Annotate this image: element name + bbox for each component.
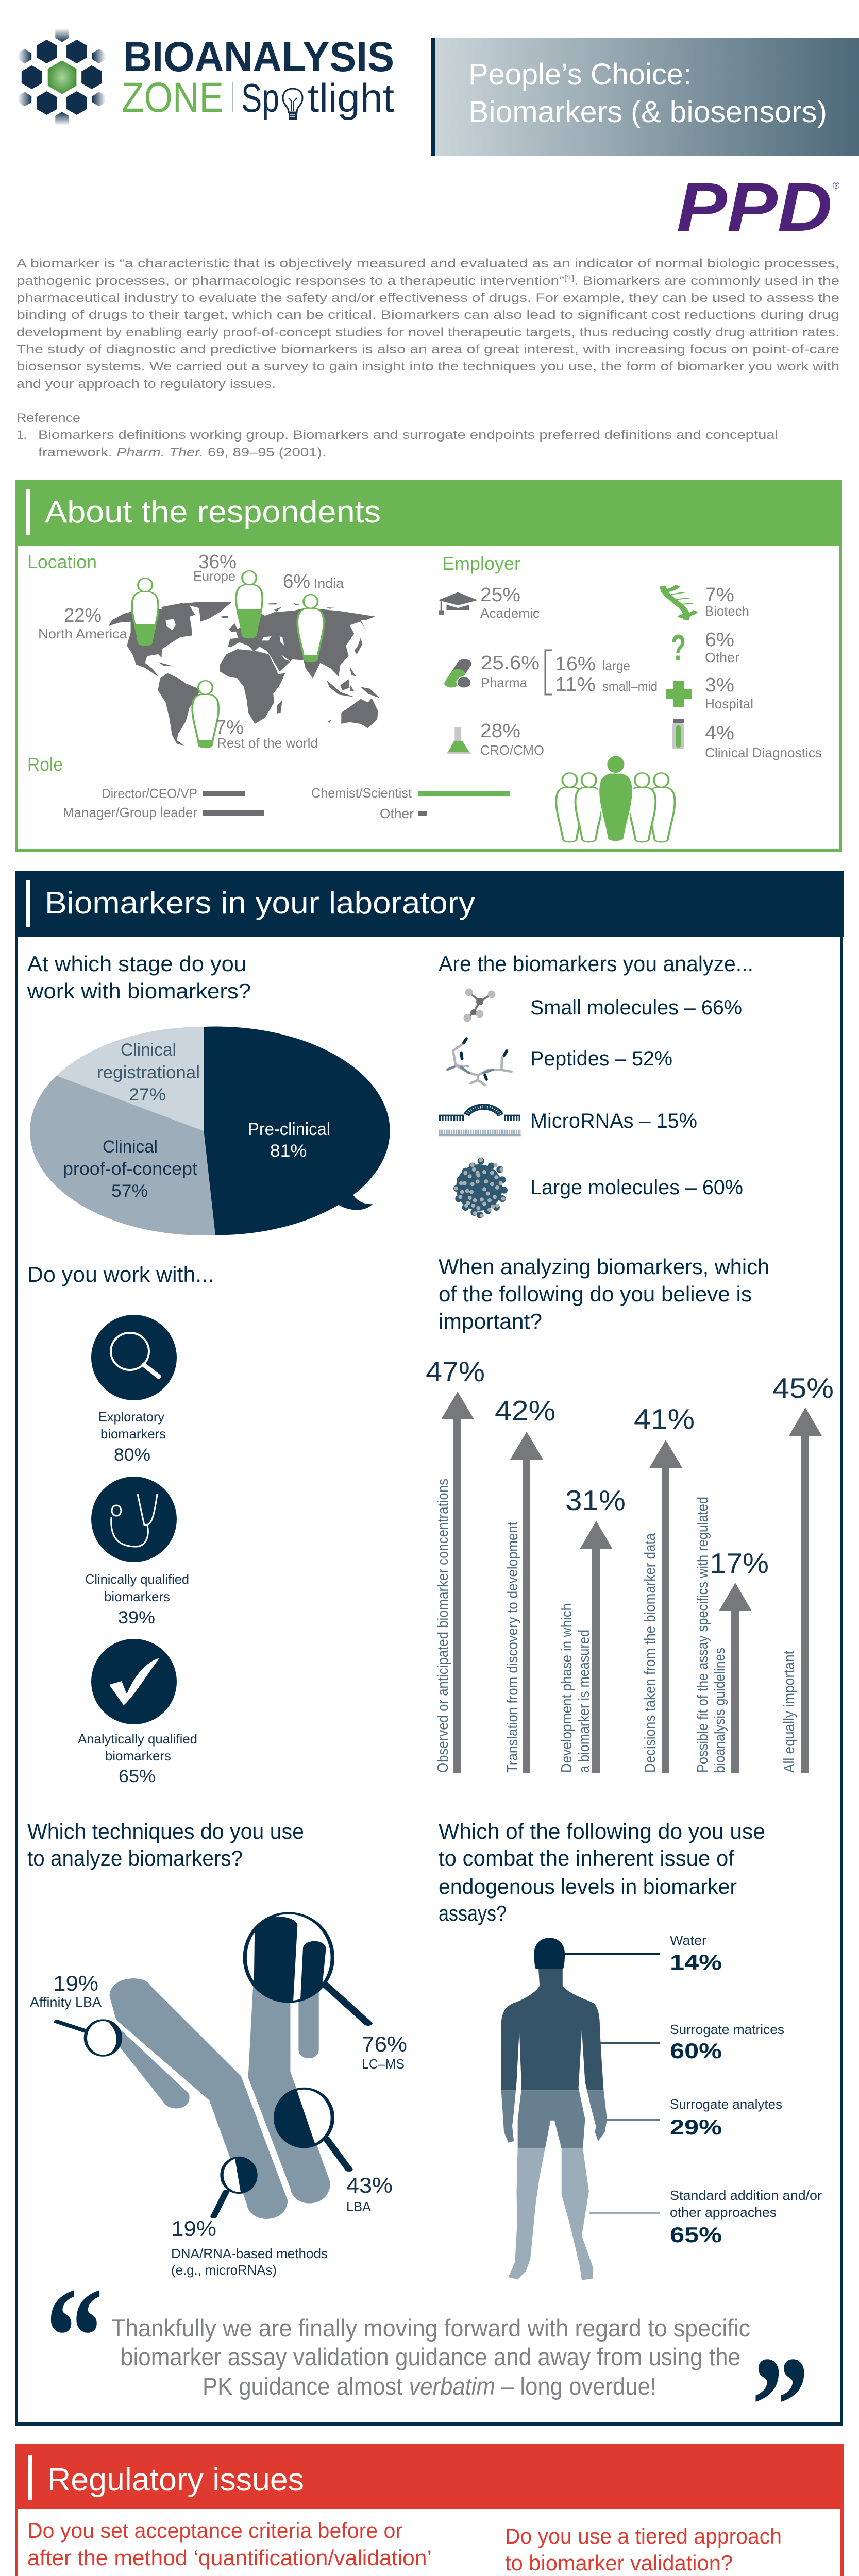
question: tiered approach: to biomarker validation? <box>505 2551 733 2575</box>
question: which techniques: Which techniques do you use <box>27 1819 304 1843</box>
magnifier: affinity LBA <box>57 2019 123 2058</box>
employer: CRO/CMO: 28% <box>480 720 520 742</box>
employer: clinical diagnostics: 4% <box>705 722 734 744</box>
icon: hospital cross <box>666 681 692 707</box>
stat: exploratory biomarkers: biomarkers <box>100 1426 166 1442</box>
location labels: Europe <box>193 568 235 584</box>
icon: peptide <box>447 1039 512 1085</box>
icon: test tube <box>672 719 684 749</box>
stat: analytically qualified biomarkers: Analytically qualified <box>78 1731 197 1747</box>
employer: other: 6% <box>705 629 734 651</box>
heading: about the respondents <box>26 489 381 535</box>
figure: India <box>296 595 325 664</box>
stat: analytically qualified biomarkers <box>78 1731 197 1786</box>
intro paragraph <box>16 257 839 391</box>
location labels: 6% <box>283 571 310 592</box>
figure: North America <box>131 578 159 647</box>
question: when analyzing biomarkers: important? <box>439 1309 542 1333</box>
location labels: 22% <box>64 605 102 626</box>
callout: surrogate analytes: Surrogate analytes <box>670 2096 782 2112</box>
question: when analyzing biomarkers: When analyzing biomarkers, which <box>439 1255 769 1279</box>
technique labels: LC–MS <box>362 2056 405 2072</box>
icon: large molecule <box>456 1160 504 1216</box>
question: which techniques: to analyze biomarkers? <box>27 1846 243 1870</box>
question: at which stage: work with biomarkers? <box>27 979 251 1003</box>
role bars: Other <box>380 806 414 821</box>
label: microRNAs: MicroRNAs – 15% <box>530 1110 697 1132</box>
employer: clinical diagnostics <box>705 722 822 760</box>
panel: about the respondents <box>15 480 842 850</box>
icon: microRNA hairpin <box>439 1107 521 1135</box>
quote: PK guidance almost verbatim – long overdue! <box>203 2372 656 2400</box>
location labels <box>38 551 344 751</box>
diagram: human body <box>501 1938 607 2280</box>
subheading: role: Role <box>27 754 63 775</box>
logo: wordmark ZONE Spotlight: Sp <box>241 75 279 121</box>
label: peptides: Peptides – 52% <box>530 1047 672 1070</box>
technique labels: (e.g., microRNAs) <box>171 2262 277 2278</box>
stat: exploratory biomarkers: 80% <box>114 1445 150 1465</box>
question: tiered approach: Do you use a tiered approach <box>505 2524 782 2548</box>
employer: other <box>705 629 739 665</box>
callout: surrogate matrices <box>600 2022 784 2063</box>
logo: wordmark ZONE Spotlight <box>122 74 394 121</box>
intro paragraph: [1] <box>564 274 574 282</box>
callout: surrogate analytes: 29% <box>670 2115 722 2139</box>
heading: biomarkers in your laboratory <box>26 880 475 927</box>
figure: rest of the world <box>191 681 220 750</box>
employer: biotech: Biotech <box>705 603 749 619</box>
question: which techniques <box>27 1819 304 1870</box>
employer: academic: 25% <box>480 584 520 606</box>
icon: graduation cap <box>438 592 478 615</box>
arrow chart: importance: Translation from discovery to development <box>504 1522 521 1773</box>
question: at which stage: At which stage do you <box>27 952 246 976</box>
employer: academic: Academic <box>480 605 540 621</box>
heading: regulatory issues: Regulatory issues <box>47 2462 304 2498</box>
figure: Europe <box>235 571 263 640</box>
reference: Reference <box>16 411 80 425</box>
sponsor logo: PPD: PPD <box>677 169 832 246</box>
intro paragraph: biosensor systems. We carried out a survey to gain insight into the techniques you use, the form of biomarker you work with <box>16 360 839 374</box>
diagram: antibody with magnifiers <box>57 1912 368 2219</box>
arrow chart: importance <box>426 1355 834 1773</box>
question: tiered approach <box>505 2524 782 2575</box>
employer: clinical diagnostics: Clinical Diagnostics <box>705 745 822 760</box>
intro paragraph: A biomarker is “a characteristic that is objectively measured and evaluated as an indicator of normal biologic processes, <box>16 257 839 270</box>
reference: Biomarkers definitions working group. Biomarkers and surrogate endpoints preferred definitions and conceptual <box>38 428 778 442</box>
role bars <box>63 785 510 821</box>
arrow chart: importance: 17% <box>710 1547 769 1579</box>
panel: regulatory issues <box>15 2444 844 2576</box>
technique labels: Affinity LBA <box>30 1994 102 2010</box>
callout: water: Water <box>670 1933 706 1948</box>
technique labels: 19% <box>171 2216 216 2241</box>
heading: about the respondents: About the respondents <box>45 495 381 529</box>
employer: CRO/CMO: CRO/CMO <box>480 742 544 758</box>
title panel <box>431 38 859 156</box>
callout: standard addition <box>589 2188 822 2247</box>
stat: analytically qualified biomarkers: 65% <box>119 1767 156 1786</box>
pie chart: stage speech bubble: proof-of-concept <box>63 1159 198 1179</box>
callout: standard addition: Standard addition and/or <box>670 2188 822 2203</box>
pie chart: stage speech bubble <box>30 1027 390 1235</box>
magnifier: LBA <box>271 2087 349 2170</box>
intro paragraph: pathogenic processes, or pharmacologic responses to a therapeutic intervention” <box>16 274 459 288</box>
arrow chart: importance: 31% <box>565 1484 626 1516</box>
employer: other: Other <box>705 650 739 665</box>
label: small molecules: Small molecules – 66% <box>530 996 742 1019</box>
sponsor logo: PPD: ® <box>833 180 839 191</box>
quote: “ <box>45 2259 103 2415</box>
question: at which stage <box>27 952 251 1003</box>
callout: surrogate matrices: 60% <box>670 2039 722 2063</box>
technique labels: 19% <box>53 1971 98 1995</box>
world map <box>109 602 380 746</box>
arrow chart: importance: Possible fit of the assay specifics with regulated <box>695 1497 711 1773</box>
icon: pill <box>451 664 471 688</box>
heading: biomarkers in your laboratory: Biomarkers in your laboratory <box>45 886 475 920</box>
stat: analytically qualified biomarkers: biomarkers <box>105 1748 171 1764</box>
technique labels <box>30 1971 407 2278</box>
pie chart: stage speech bubble: 57% <box>111 1181 148 1201</box>
intro paragraph: development by enabling early proof-of-concept studies for novel therapeutic targets, thus reducing costly drug attrition rates. <box>16 326 839 340</box>
title panel: Biomarkers (& biosensors) <box>468 95 827 129</box>
role bars: Manager/Group leader <box>63 805 197 820</box>
logo: wordmark BIOANALYSIS: BIOANALYSIS <box>123 33 394 80</box>
question: which of the following: to combat the inherent issue of <box>439 1846 734 1870</box>
panel: biomarkers in your laboratory <box>15 871 844 2484</box>
technique labels: LBA <box>346 2199 372 2214</box>
subheading: employer: Employer <box>442 553 520 574</box>
reference: framework. Pharm. Ther. 69, 89–95 (2001). <box>38 446 326 460</box>
employer: hospital <box>705 674 753 711</box>
reference: 1. <box>16 428 27 442</box>
employer: pharma: 25.6% <box>481 652 540 674</box>
callout: standard addition: 65% <box>670 2223 722 2247</box>
callout: surrogate analytes <box>607 2096 782 2139</box>
arrow chart: importance: 41% <box>634 1403 695 1435</box>
icon: small molecule <box>464 988 496 1022</box>
employer: pharma: small–mid <box>602 679 658 694</box>
pie chart: stage speech bubble: Pre-clinical <box>248 1120 330 1139</box>
arrow chart: importance: Decisions taken from the biomarker data <box>642 1533 659 1773</box>
icon: question mark: ? <box>671 628 686 669</box>
employer: pharma: 16% <box>555 653 596 675</box>
title panel: People’s Choice: <box>468 58 692 91</box>
employer: pharma: large <box>602 658 630 673</box>
arrow chart: importance: a biomarker is measured <box>576 1630 593 1773</box>
employer: biotech <box>705 584 749 619</box>
employer: pharma: 11% <box>555 674 596 696</box>
arrow chart: importance: 47% <box>426 1355 485 1387</box>
employer: CRO/CMO <box>480 720 544 758</box>
stat: clinically qualified biomarkers: 39% <box>118 1608 155 1628</box>
icon: flask <box>446 727 471 754</box>
location figures <box>131 571 325 750</box>
question: when analyzing biomarkers <box>439 1255 769 1333</box>
location labels: India <box>314 575 344 591</box>
intro paragraph: and your approach to regulatory issues. <box>16 377 276 391</box>
question: acceptance criteria <box>27 2518 432 2576</box>
magnifier: DNA/RNA <box>214 2156 259 2216</box>
logo: wordmark ZONE Spotlight: tlight <box>308 75 394 121</box>
stat: exploratory biomarkers: Exploratory <box>98 1409 164 1425</box>
location labels: 36% <box>198 551 237 573</box>
pie chart: stage speech bubble: Clinical <box>121 1040 176 1060</box>
question: which of the following <box>439 1819 765 1925</box>
pie chart: stage speech bubble: 81% <box>270 1141 307 1161</box>
arrow chart: importance: Development phase in which <box>559 1603 575 1773</box>
question: are the biomarkers: Are the biomarkers you analyze... <box>439 952 753 976</box>
employer: pharma <box>481 650 658 696</box>
logo: hexagon mark <box>18 28 106 125</box>
arrow chart: importance: 42% <box>495 1395 555 1427</box>
question: acceptance criteria: after the method ‘quantification/validation’ <box>27 2546 432 2570</box>
employer: academic <box>480 584 540 621</box>
stat: clinically qualified biomarkers <box>85 1571 189 1628</box>
quote: Thankfully we are finally moving forward with regard to specific <box>111 2314 750 2342</box>
magnifier: LC-MS <box>244 1912 368 2023</box>
employer: hospital: 3% <box>705 674 734 696</box>
reference <box>16 411 778 460</box>
technique labels: 76% <box>362 2032 407 2056</box>
callout: surrogate matrices: Surrogate matrices <box>670 2022 784 2037</box>
role bars: Director/CEO/VP <box>102 786 197 801</box>
arrow chart: importance: All equally important <box>781 1651 798 1773</box>
quote: biomarker assay validation guidance and away from using the <box>121 2343 740 2370</box>
icon: group of people <box>556 756 675 842</box>
question: which of the following: endogenous levels in biomarker <box>439 1874 737 1899</box>
stat: clinically qualified biomarkers: biomarkers <box>104 1589 170 1604</box>
arrow chart: importance: Observed or anticipated biomarker concentrations <box>435 1479 451 1773</box>
question: do you work with: Do you work with... <box>27 1262 214 1286</box>
employer: biotech: 7% <box>705 584 734 606</box>
question: which of the following: assays? <box>439 1901 507 1925</box>
location labels: 7% <box>215 717 244 738</box>
intro paragraph: The study of diagnostic and predictive biomarkers is also an area of great interest, with increasing focus on point-of-care <box>16 343 839 357</box>
employer: pharma: Pharma <box>481 675 528 690</box>
role bars: Chemist/Scientist <box>311 785 412 801</box>
pie chart: stage speech bubble: 27% <box>129 1085 166 1105</box>
arrow chart: importance: bioanalysis guidelines <box>712 1648 728 1773</box>
stat: clinically qualified biomarkers: Clinically qualified <box>85 1571 189 1587</box>
logo: wordmark ZONE Spotlight: ZONE <box>122 74 224 121</box>
employer: hospital: Hospital <box>705 696 753 711</box>
arrow chart: importance: 45% <box>772 1372 834 1404</box>
question: when analyzing biomarkers: of the following do you believe is <box>439 1282 752 1306</box>
technique labels: DNA/RNA-based methods <box>171 2246 328 2261</box>
question: which of the following: Which of the following do you use <box>439 1819 765 1843</box>
icon: magnifying glass <box>91 1315 177 1400</box>
location labels: Rest of the world <box>217 735 318 751</box>
question: acceptance criteria: Do you set acceptance criteria before or <box>27 2518 402 2543</box>
quote <box>45 2259 809 2484</box>
location labels: North America <box>38 626 128 641</box>
intro paragraph: binding of drugs to their target, which can be critical. Biomarkers can also lead to significant cost reductions during drug <box>16 308 839 322</box>
pie chart: stage speech bubble: Clinical <box>103 1137 158 1157</box>
technique labels: 43% <box>346 2173 393 2197</box>
intro paragraph: pharmaceutical industry to evaluate the safety and/or effectiveness of drugs. For example, they can be used to assess the <box>16 291 839 305</box>
icon: stethoscope <box>91 1477 177 1562</box>
stat: exploratory biomarkers <box>98 1409 166 1465</box>
icon: DNA helix <box>663 586 696 620</box>
callout: water <box>563 1933 722 1974</box>
icon: check mark <box>91 1639 177 1724</box>
quote: ” <box>751 2328 809 2484</box>
pie chart: stage speech bubble: registrational <box>97 1063 200 1082</box>
intro paragraph: . Biomarkers are commonly used in the <box>574 274 839 288</box>
label: large molecules: Large molecules – 60% <box>530 1176 743 1199</box>
callout: water: 14% <box>670 1950 722 1974</box>
callout: standard addition: other approaches <box>670 2205 777 2220</box>
header <box>18 28 859 246</box>
subheading: location: Location <box>27 551 97 572</box>
